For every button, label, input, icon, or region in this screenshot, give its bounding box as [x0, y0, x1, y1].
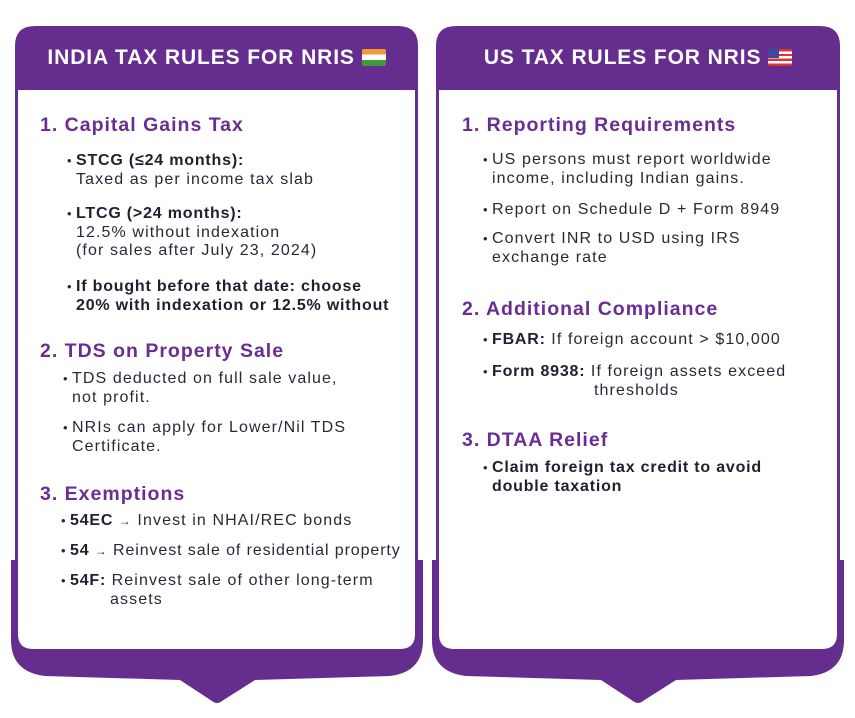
text: • [483, 202, 489, 217]
bullet: STCG [67, 152, 314, 188]
bullet: schedule D: Report on Schedule D + Form 8949 [492, 201, 780, 218]
text: • [63, 420, 69, 435]
text: • [67, 153, 73, 168]
bullet: 54: 54 → Reinvest sale of residential property [70, 542, 401, 559]
bullet: NRIs: Certificate. [72, 438, 162, 455]
panel: us base [432, 26, 844, 703]
bullet: worldwide: US persons must report worldwide [492, 151, 772, 168]
text: • [483, 231, 489, 246]
bullet: form 8938: Form 8938: If foreign assets exceed [492, 363, 786, 380]
bullet: LTCG [67, 205, 317, 259]
heading: us: US TAX RULES FOR NRIS [484, 46, 761, 69]
text: • [63, 371, 69, 386]
bullet: LTCG: 12.5% without indexation [76, 224, 280, 240]
bullet: NRIs: NRIs can apply for Lower/Nil TDS [72, 419, 346, 436]
text: • [483, 152, 489, 167]
bullet: worldwide [483, 151, 772, 187]
section: exemptions: 3. Exemptions [40, 483, 185, 505]
text: • [483, 332, 489, 347]
text: • [67, 206, 73, 221]
bullet: TDS deducted [63, 370, 338, 406]
bullet: TDS deducted: not profit. [72, 389, 151, 406]
text: • [483, 460, 489, 475]
bullet: LTCG: LTCG (>24 months): [76, 205, 243, 222]
section: capital gains: 1. Capital Gains Tax [40, 114, 244, 136]
text: • [61, 573, 67, 588]
bullet: credit [483, 459, 762, 495]
bullet: 54F: 54F: Reinvest sale of other long-term [70, 572, 374, 589]
bullet: bought before: 20% with indexation or 12.5% without [76, 297, 389, 314]
heading: india: INDIA TAX RULES FOR NRIS [47, 46, 355, 69]
text: • [67, 279, 73, 294]
bullet: worldwide: income, including Indian gains. [492, 170, 745, 187]
section: DTAA: 3. DTAA Relief [462, 429, 608, 451]
bullet: form 8938 [483, 363, 786, 399]
bullet: convert: Convert INR to USD using IRS [492, 230, 741, 247]
bullet: 54F: assets [110, 591, 163, 608]
panel: india base [11, 26, 423, 703]
bullet: TDS deducted: TDS deducted on full sale value, [72, 370, 338, 387]
bullet: credit: Claim foreign tax credit to avoid [492, 459, 762, 476]
bullet: 54F [61, 572, 374, 608]
bullet: bought before: If bought before that date: choose [76, 278, 362, 295]
text: • [61, 513, 67, 528]
bullet: STCG: Taxed as per income tax slab [76, 171, 314, 188]
bullet: LTCG: (for sales after July 23, 2024) [76, 242, 317, 259]
bullet: convert [483, 230, 741, 266]
bullet: credit: double taxation [492, 478, 622, 495]
bullet: NRIs [63, 419, 346, 455]
bullet: 54EC: 54EC → Invest in NHAI/REC bonds [70, 512, 352, 529]
text: • [483, 364, 489, 379]
bullet: FBAR: FBAR: If foreign account > $10,000 [492, 331, 781, 348]
bullet: form 8938: thresholds [594, 382, 679, 399]
section: TDS: 2. TDS on Property Sale [40, 340, 284, 362]
bullet: convert: exchange rate [492, 249, 608, 266]
bullet: STCG: STCG (≤24 months): [76, 152, 244, 169]
section: compliance: 2. Additional Compliance [462, 298, 718, 320]
bullet: bought before [67, 278, 389, 314]
text: • [61, 543, 66, 558]
section: reporting: 1. Reporting Requirements [462, 114, 736, 136]
